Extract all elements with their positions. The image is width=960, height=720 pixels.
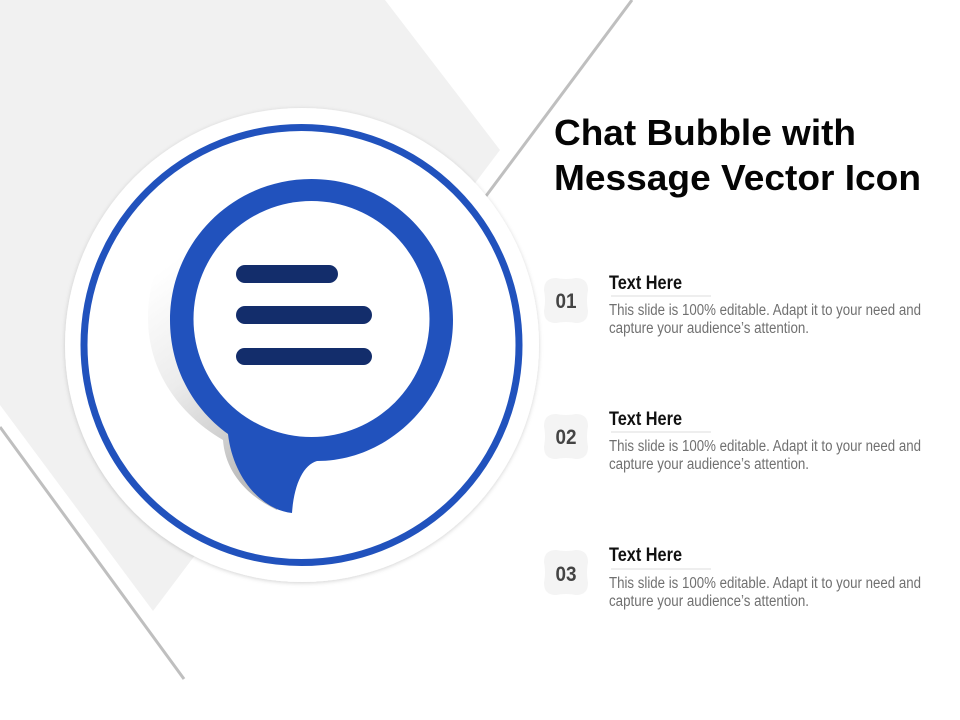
heading 03: Text Here	[609, 545, 682, 566]
message line 3	[236, 348, 372, 365]
icon medallion	[65, 108, 539, 582]
diagonal line: bottom left	[0, 427, 184, 679]
title	[554, 112, 921, 198]
heading 02: Text Here	[609, 409, 682, 430]
title: Message Vector Icon	[554, 157, 921, 198]
blue ring	[84, 128, 519, 562]
bubble body with tail	[170, 179, 453, 513]
description 01: capture your audience’s attention.	[609, 320, 809, 337]
number badge 03: 03	[556, 563, 576, 586]
diagonal line: top right	[486, 0, 632, 196]
number badge 01: 01	[556, 290, 577, 313]
chat bubble icon	[148, 179, 453, 513]
number badge 02: 02	[556, 426, 576, 449]
item 02	[544, 409, 921, 473]
item 03	[544, 545, 921, 610]
message line 2	[236, 306, 372, 324]
description 03: capture your audience’s attention.	[609, 593, 809, 610]
background diamond panel	[0, 0, 500, 611]
number badge 01	[544, 278, 588, 323]
message line 1	[236, 265, 338, 283]
title: Chat Bubble with	[554, 112, 856, 153]
heading 01: Text Here	[609, 273, 682, 294]
description 02	[609, 438, 921, 473]
white disc	[65, 108, 539, 582]
description 01	[609, 302, 921, 337]
description 02: capture your audience’s attention.	[609, 456, 809, 473]
bubble shadow	[148, 190, 300, 510]
description 03	[609, 575, 921, 610]
bubble interior	[194, 201, 430, 437]
number badge 02	[544, 414, 588, 459]
number badge 03	[544, 550, 588, 595]
item 01	[544, 273, 921, 337]
